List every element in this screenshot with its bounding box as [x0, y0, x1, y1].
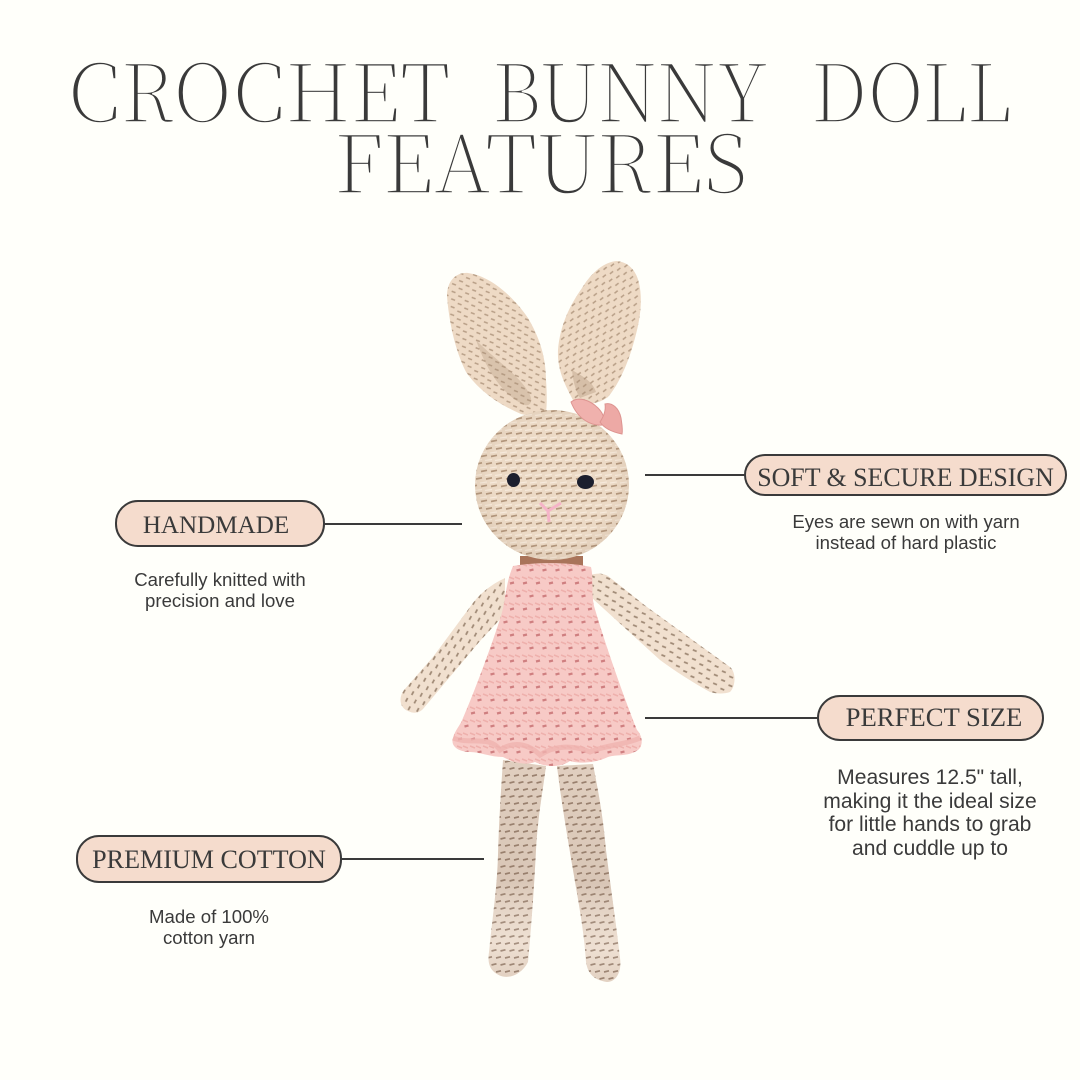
text: premium cotton description: Made of 100%	[149, 906, 269, 927]
nose	[540, 503, 561, 522]
text: perfect size description	[823, 766, 1037, 860]
head	[475, 410, 629, 560]
label: premium cotton	[76, 835, 342, 883]
connector: soft and secure design	[645, 474, 746, 476]
dress	[452, 563, 642, 766]
title: CROCHET	[68, 30, 450, 146]
left leg	[488, 760, 546, 977]
text: perfect size description: making it the ideal size	[823, 790, 1037, 812]
right arm	[590, 574, 734, 694]
connector: premium cotton	[341, 858, 484, 860]
text: handmade description: precision and love	[145, 590, 295, 611]
neck	[520, 556, 583, 568]
crochet bunny doll	[401, 261, 734, 982]
label: handmade: HANDMADE	[143, 512, 289, 539]
label: perfect size: PERFECT SIZE	[846, 702, 1022, 732]
label: soft and secure design	[744, 454, 1067, 496]
title: DOLL	[811, 30, 1012, 146]
text: soft and secure description: Eyes are sewn on with yarn	[792, 511, 1020, 532]
label: handmade	[115, 500, 325, 547]
text: premium cotton description	[149, 906, 269, 948]
connector: handmade	[324, 522, 462, 524]
right leg	[557, 764, 620, 982]
label: soft and secure design: SOFT & SECURE DESIGN	[757, 463, 1054, 492]
text: perfect size description: for little hands to grab	[829, 813, 1031, 836]
dress hem	[453, 738, 640, 755]
ear: right	[558, 261, 641, 404]
ear: left	[447, 273, 547, 416]
text: handmade description	[134, 569, 306, 611]
text: handmade description: Carefully knitted with	[134, 569, 306, 590]
flower	[571, 399, 622, 434]
text: premium cotton description: cotton yarn	[163, 927, 255, 948]
text: perfect size description: Measures 12.5" tall,	[837, 766, 1023, 789]
connector: perfect size	[645, 717, 819, 719]
label: premium cotton: PREMIUM COTTON	[92, 845, 326, 874]
title: FEATURES	[334, 101, 748, 217]
text: soft and secure description: instead of hard plastic	[816, 532, 996, 553]
text: perfect size description: and cuddle up to	[852, 836, 1008, 860]
title	[68, 30, 1012, 217]
eye: left	[507, 473, 520, 487]
left arm	[401, 578, 505, 713]
eye: right	[577, 475, 594, 489]
label: perfect size	[817, 695, 1044, 741]
text: soft and secure description	[792, 511, 1020, 553]
title: BUNNY	[492, 30, 768, 146]
